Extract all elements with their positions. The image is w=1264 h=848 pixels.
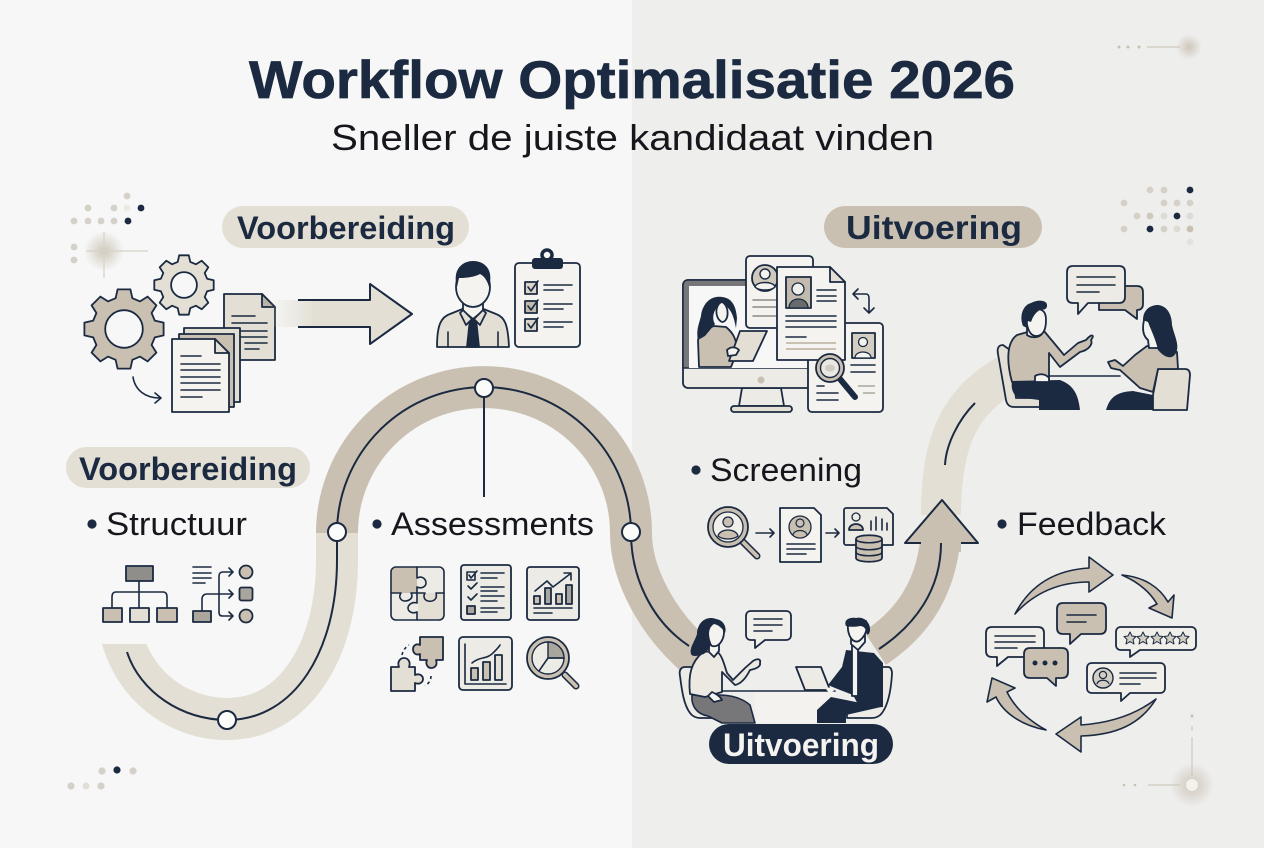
back document	[224, 294, 275, 360]
woman on screen	[697, 297, 767, 367]
profile and database	[844, 508, 893, 562]
ribbon node: right	[622, 523, 640, 541]
icon: trend chart	[527, 567, 579, 620]
ribbon upward arrow	[879, 403, 978, 649]
decoration: top-right dot grid	[1121, 187, 1193, 245]
icon: feedback cycle	[986, 557, 1196, 752]
icon: clipboard checklist	[515, 250, 580, 347]
bubble: profile review	[1087, 663, 1165, 701]
icon: puzzle square	[391, 567, 444, 620]
icon: checklist	[461, 565, 511, 620]
laptop	[796, 667, 830, 690]
arrow	[756, 529, 774, 537]
icon: flow routing	[193, 566, 252, 622]
table edge	[722, 690, 835, 692]
swap arrows	[853, 289, 874, 313]
icon: screening flow	[708, 507, 893, 562]
cycle arrow right	[1122, 575, 1174, 618]
workflow ribbon path	[118, 373, 1010, 720]
icon: gears and documents	[84, 255, 275, 412]
decoration: top-left dots and sparkle	[71, 193, 148, 278]
big gear	[84, 289, 164, 369]
background: right half	[632, 0, 1264, 848]
icon: org chart	[103, 566, 177, 622]
bubble: taupe	[1057, 603, 1106, 644]
arrow	[826, 529, 839, 537]
icon: businessman	[437, 261, 509, 347]
title: Workflow Optimalisatie 2026	[249, 51, 1015, 110]
scene: interview at table	[680, 611, 892, 723]
chair left	[680, 667, 731, 718]
CV front	[777, 267, 845, 360]
subtitle: Sneller de juiste kandidaat vinden	[331, 117, 934, 158]
badge: Voorbereiding top: Voorbereiding	[237, 210, 455, 246]
ribbon node: bottom	[218, 711, 236, 729]
magnifier with candidate	[708, 507, 757, 556]
woman	[689, 618, 760, 723]
badge: Voorbereiding left: Voorbereiding	[79, 451, 297, 487]
ribbon node: left	[328, 523, 346, 541]
chair right	[847, 667, 892, 718]
icon: bar chart	[459, 637, 512, 690]
ribbon node: top	[475, 379, 493, 397]
table	[755, 691, 835, 723]
speech bubble front	[1067, 266, 1125, 314]
bullet: Assessments: Assessments	[391, 506, 594, 542]
curved arrow	[133, 377, 161, 403]
decoration: bottom-left dots	[67, 766, 137, 790]
table	[1049, 375, 1120, 377]
speech bubble	[746, 611, 791, 648]
woman	[1106, 305, 1190, 410]
bubble: text	[986, 627, 1044, 666]
decoration: top-right glow line	[1118, 34, 1202, 60]
cycle arrow bottom	[1056, 699, 1156, 752]
arrow: preparation to person	[270, 284, 412, 344]
CV back	[746, 256, 813, 328]
badge: Uitvoering dark: Uitvoering	[723, 727, 879, 763]
bubble: dots	[1024, 648, 1068, 686]
bubble: stars	[1116, 627, 1196, 657]
ribbon centre line	[127, 387, 689, 720]
bullet: Screening: Screening	[710, 452, 862, 488]
cycle arrow top	[1015, 557, 1113, 614]
decoration: bottom-right glow lines	[1123, 714, 1214, 807]
badge: Uitvoering top	[824, 206, 1042, 248]
ribbon connector line	[483, 397, 485, 497]
small gear	[154, 255, 214, 315]
background: left half	[0, 0, 632, 848]
CV back-right	[808, 323, 883, 412]
CV	[780, 508, 821, 562]
bullet: Feedback: Feedback	[1017, 506, 1167, 542]
icon: loose puzzle pieces	[391, 637, 443, 691]
man	[998, 301, 1093, 410]
magnifier	[816, 354, 855, 397]
man	[817, 618, 883, 723]
badge: Uitvoering top: Uitvoering	[846, 209, 1022, 246]
document stack	[172, 328, 240, 412]
cycle arrow left	[987, 678, 1046, 730]
bullet: Structuur: Structuur	[106, 506, 247, 542]
speech bubble back	[1099, 286, 1143, 319]
icon: recruiter on video monitor with CVs	[683, 256, 883, 412]
icon: two people talking, top right	[998, 266, 1190, 410]
monitor	[683, 280, 813, 412]
icon: magnifier pie chart	[527, 637, 576, 686]
